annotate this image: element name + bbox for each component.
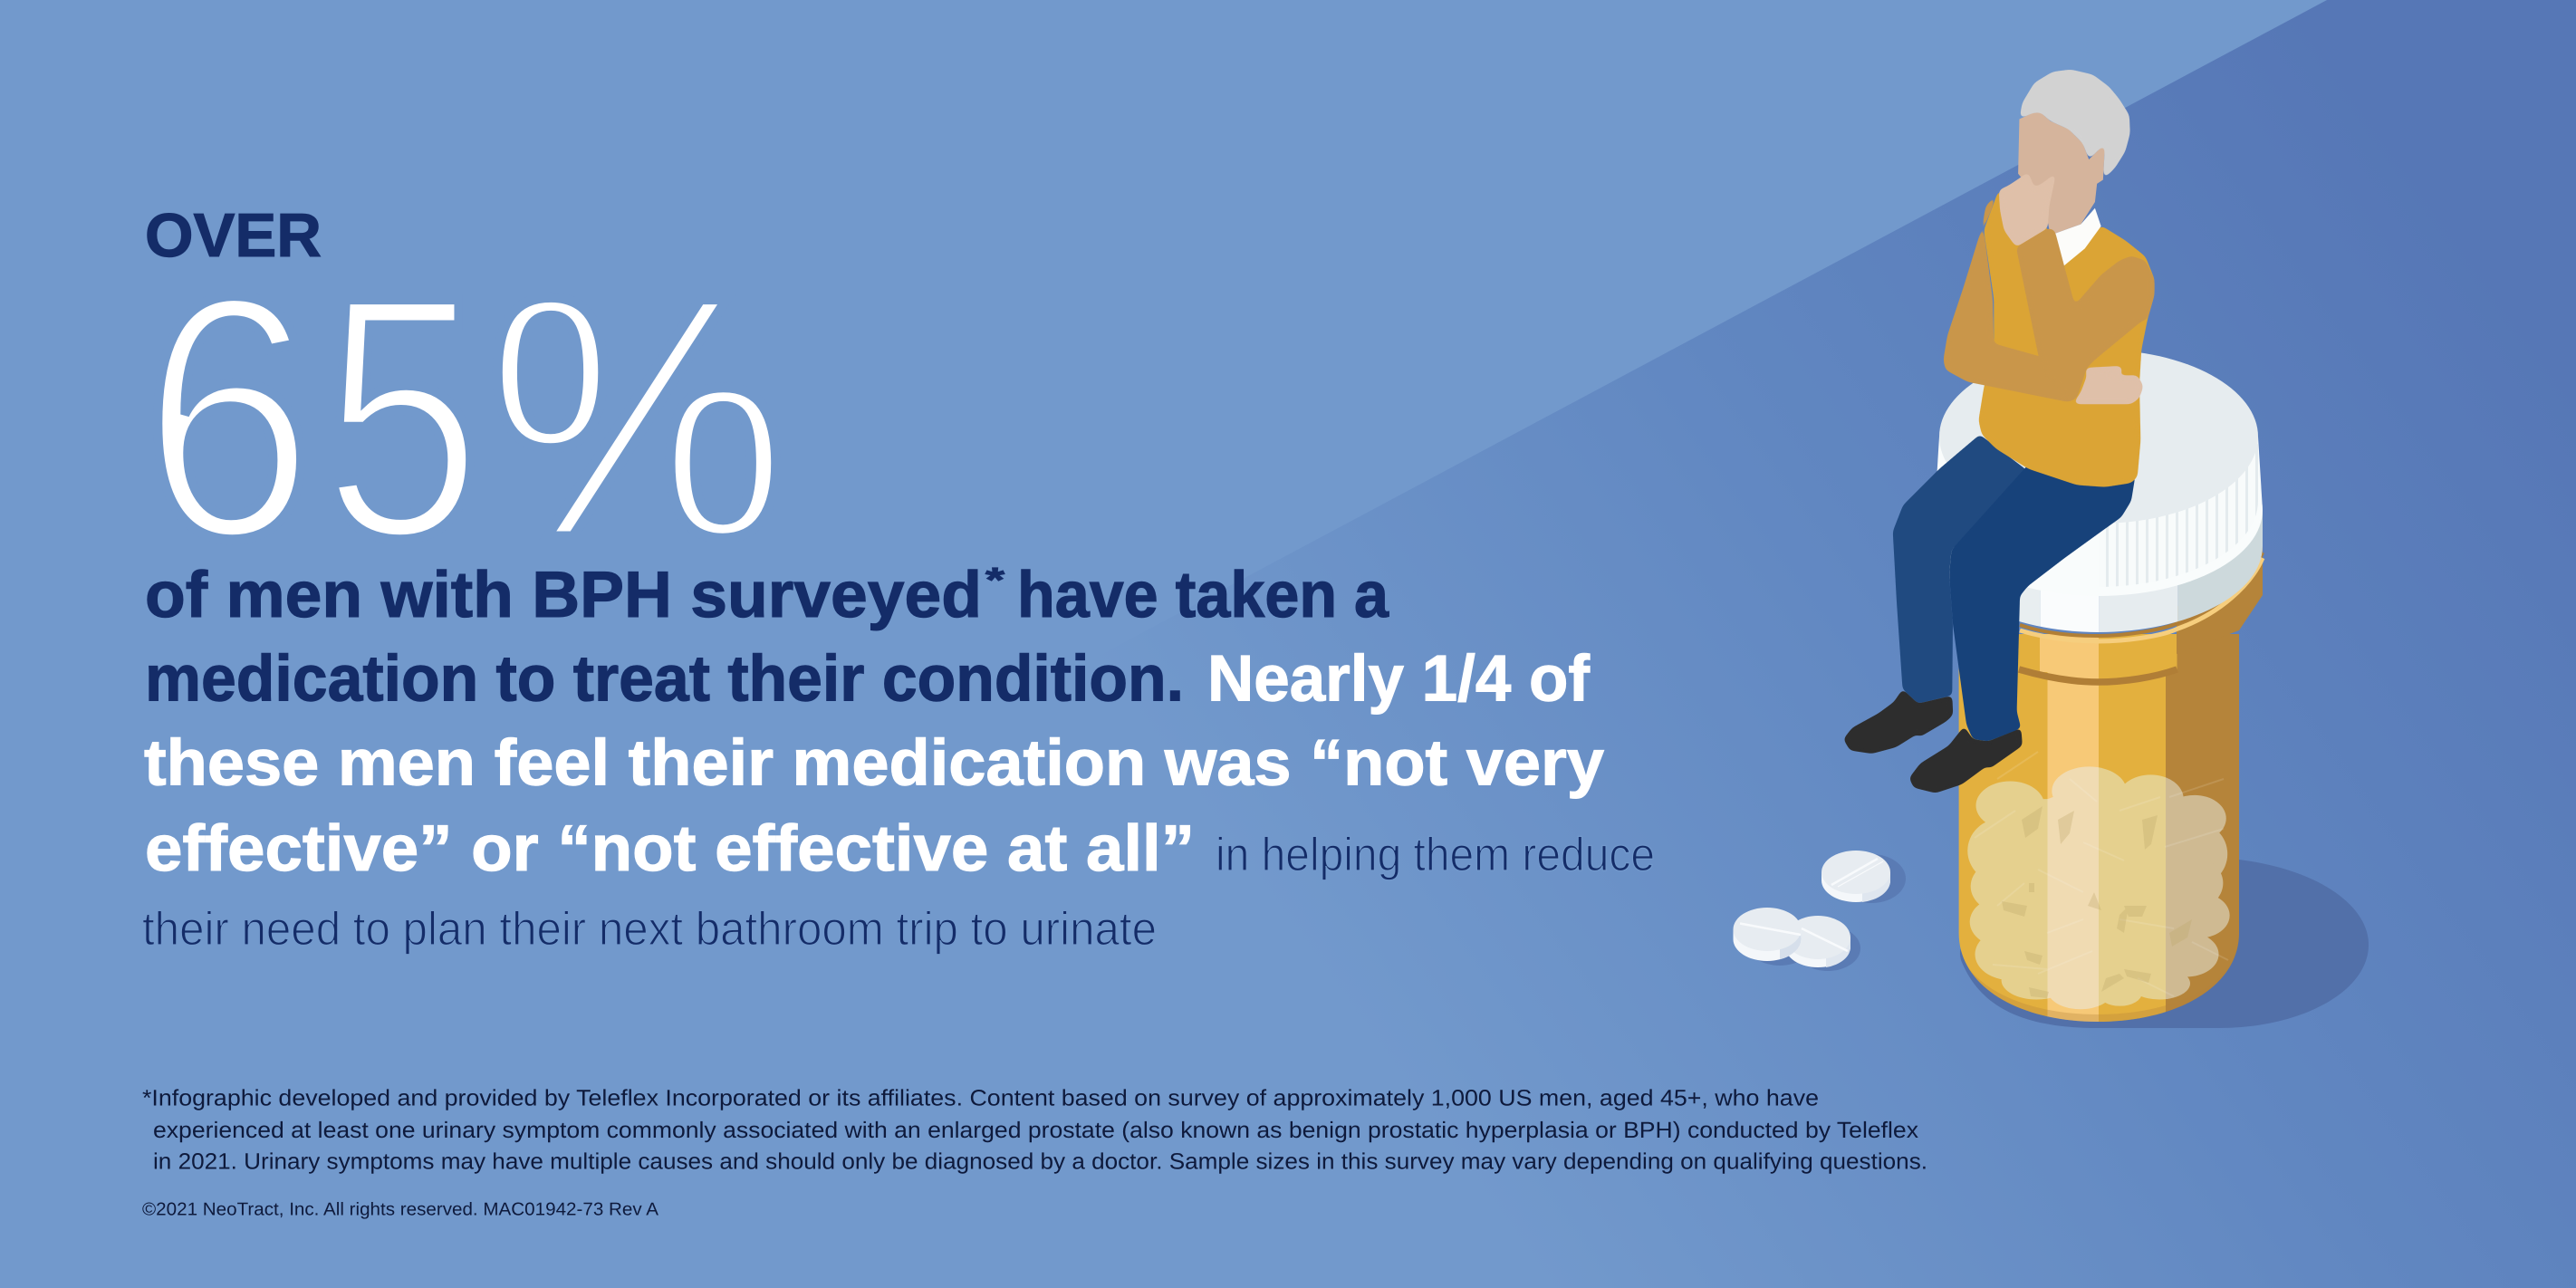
raised hand	[1999, 172, 2057, 247]
bottle cast shadow	[1960, 860, 2369, 1028]
cap white band	[1935, 437, 2263, 596]
face	[2018, 112, 2105, 235]
gold rim line	[2020, 558, 2263, 641]
main statement text: medication to treat their condition.	[145, 643, 1184, 716]
footnote: *Infographic developed and provided by Teleflex Incorporated or its affiliates. Content based on survey of approximately 1,000 US men, aged 45+, who have	[142, 1085, 1819, 1110]
brown rim line	[2020, 553, 2263, 636]
hair	[2019, 70, 2130, 179]
far leg	[1893, 435, 2028, 704]
lower hand	[2072, 366, 2143, 404]
far arm	[1944, 190, 2087, 402]
main statement text: these men feel their medication was “not very	[144, 726, 1604, 799]
icon: loose tablets	[1734, 851, 1906, 971]
main statement text: have taken a	[1017, 559, 1389, 631]
tablets inside bottle	[1967, 752, 2230, 1009]
collar	[2051, 208, 2101, 267]
near arm	[2016, 228, 2155, 402]
diagonal shadow band	[906, 0, 2576, 1288]
label: over: OVER	[145, 201, 322, 270]
sweater torso	[1978, 190, 2155, 487]
man sitting on bottle	[1843, 70, 2155, 793]
far shoe	[1843, 689, 1953, 754]
main statement text: their need to plan their next bathroom trip to urinate	[142, 903, 1157, 956]
pill bottle	[1929, 350, 2264, 1033]
footnote: experienced at least one urinary symptom commonly associated with an enlarged prostate (also known as benign prostatic hyperplasia or BPH) conducted by Teleflex	[153, 1118, 1919, 1143]
big number 65%: 5	[322, 225, 482, 610]
collar groove	[2019, 669, 2177, 682]
main statement text	[142, 559, 1655, 956]
main statement text: effective” or “not effective at all”	[145, 812, 1195, 885]
big number 65%	[142, 225, 788, 610]
main statement text: in helping them reduce	[1216, 829, 1655, 881]
bottle body	[1956, 625, 2242, 1033]
footnote	[142, 1085, 1927, 1174]
cap ribs	[2099, 444, 2258, 587]
main statement text: Nearly 1/4 of	[1207, 643, 1591, 716]
cap top	[1939, 350, 2258, 524]
near shoe	[1909, 726, 2023, 793]
cap rim	[1949, 505, 2263, 632]
big number 65%: %	[485, 225, 788, 610]
bottle shoulder	[2177, 543, 2263, 654]
copyright: ©2021 NeoTract, Inc. All rights reserved. MAC01942-73 Rev A	[142, 1199, 659, 1219]
footnote: in 2021. Urinary symptoms may have multiple causes and should only be diagnosed by a doctor. Sample sizes in this survey may vary depending on qualifying questions.	[153, 1149, 1927, 1174]
near leg	[1949, 465, 2136, 741]
main statement text: of men with BPH surveyed	[145, 559, 982, 631]
big number 65%: 6	[142, 225, 314, 610]
main statement text: *	[985, 562, 1004, 600]
